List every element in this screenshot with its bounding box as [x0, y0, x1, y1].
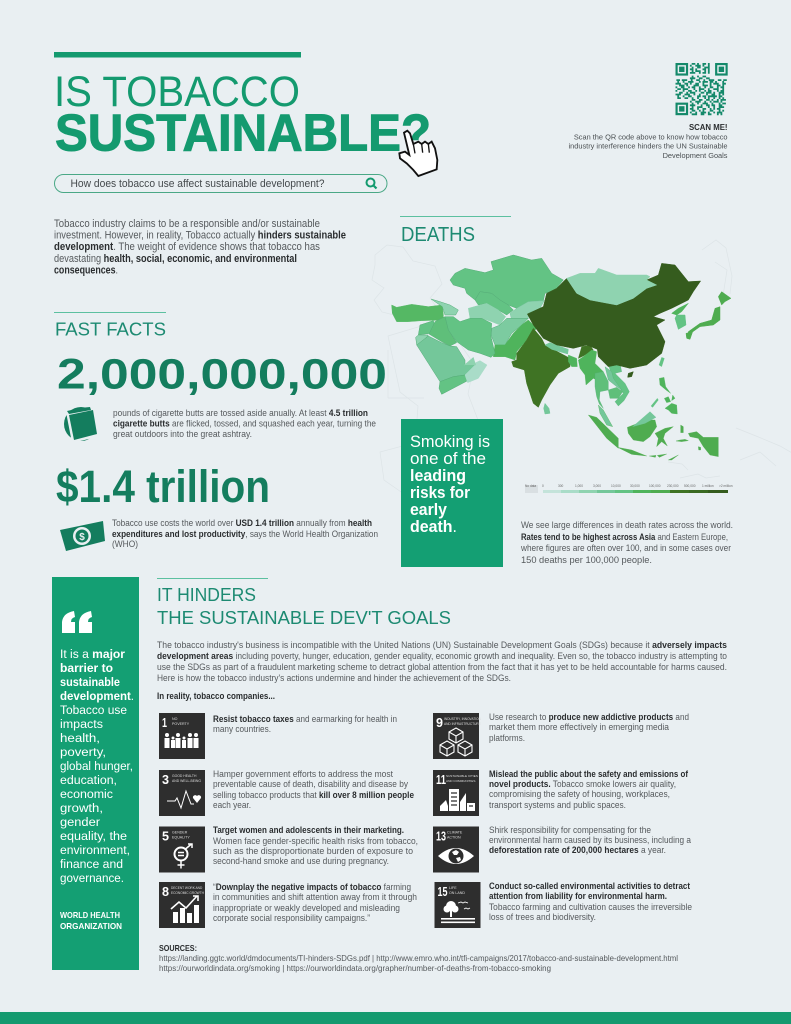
- butts description: [113, 408, 376, 439]
- quote text: economic: [60, 787, 113, 801]
- quote text: It is a major: [60, 647, 125, 661]
- SDG 3 item: Hamper government efforts to address the most: [213, 769, 393, 779]
- SDG 15 item: Conduct so-called environmental activities to detract: [489, 881, 690, 891]
- quote attribution: WORLD HEALTH: [60, 911, 120, 920]
- SDG 5 item: Target women and adolescents in their marketing.: [213, 825, 404, 835]
- SDG 9 item: [433, 712, 689, 759]
- big number: $1.4 trillion: $1.4 trillion: [56, 461, 270, 512]
- faint background world outlines: [372, 240, 791, 494]
- QR code: [676, 64, 727, 114]
- map legend: [525, 484, 733, 493]
- SDG 5 item: 5: [162, 828, 169, 844]
- SDG 9 item: Use research to produce new addictive products and: [489, 712, 689, 722]
- title: [54, 52, 431, 162]
- SDG 8 item: corporate social responsibility campaigns.”: [213, 913, 370, 923]
- deaths heading: [400, 216, 511, 246]
- quote text: environment,: [60, 843, 130, 857]
- map legend: 10,000: [611, 484, 621, 488]
- SDG 8 item: “Downplay the negative impacts of tobacco farming: [213, 882, 411, 892]
- map description text: 150 deaths per 100,000 people.: [521, 555, 652, 565]
- SDG 3 item: GOOD HEALTH: [172, 774, 197, 778]
- QR caption: Scan the QR code above to know how tobacco: [574, 132, 728, 142]
- QR caption: SCAN ME!: [689, 123, 728, 132]
- section intro paragraph: use the SDGs as part of a fraudulent marketing scheme to detract global attention from the fact that it has yet to be held accountable for harms caused.: [157, 662, 727, 672]
- intro text block: development. The weight of evidence shows that tobacco has: [54, 241, 320, 253]
- SDG 11 item: novel products. Tobacco smoke lowers air quality,: [489, 779, 676, 789]
- SDG 5 item: Women face gender-specific health risks from tobacco,: [213, 836, 418, 846]
- icon: cigarette butts bin: [64, 406, 101, 443]
- callout: smoking leading risk: one of the: [410, 450, 486, 468]
- map legend: 30,000: [630, 484, 640, 488]
- SDG 13 item: environmental harm caused by its business, including a: [489, 835, 691, 845]
- SDG 8 item: [159, 882, 417, 928]
- choropleth map of Asia: [392, 255, 731, 460]
- callout: smoking leading risk: leading: [410, 467, 466, 485]
- SDG 11 item: SUSTAINABLE CITIES: [446, 774, 478, 778]
- map legend: 300: [558, 484, 564, 488]
- cost description: [112, 518, 378, 549]
- SDG 15 item: [434, 881, 692, 928]
- map legend: 230,000: [667, 484, 679, 488]
- SDG 9 item: INDUSTRY, INNOVATION: [444, 717, 482, 721]
- quote text: gender: [60, 815, 100, 829]
- icon: banknote: $: [79, 532, 85, 543]
- SDG 1 item: 1: [162, 715, 167, 730]
- SDG 13 item: 13: [436, 828, 446, 844]
- SDG 5 item: GENDER: [172, 830, 188, 834]
- quote text: health,: [60, 731, 100, 745]
- SDG 5 item: EQUALITY: [172, 836, 190, 840]
- cost description: (WHO): [112, 539, 138, 549]
- intro text block: investment. However, in reality, Tobacco actually hinders sustainable: [54, 230, 346, 242]
- title: SUSTAINABLE?: [55, 104, 431, 162]
- SDG 15 item: ON LAND: [449, 891, 465, 895]
- section intro paragraph: The tobacco industry's business is incompatible with the United Nations (UN) Sustainable Development Goals (SDGs) because it adversely impacts: [157, 640, 727, 650]
- sources: https://landing.ggtc.world/dmdocuments/TI-hinders-SDGs.pdf | http://www.emro.who.int/tfi-campaigns/2017/tobacco-and-sustainable-development.html: [159, 954, 678, 963]
- quote text: development.: [60, 689, 134, 703]
- SDG 15 item: LIFE: [449, 886, 457, 890]
- icon: pointer hand cursor: [399, 131, 437, 176]
- callout: smoking leading risk: Smoking is: [410, 433, 490, 451]
- QR caption: [568, 123, 728, 160]
- quote text: education,: [60, 773, 117, 787]
- fast facts heading: FAST FACTS: [55, 318, 166, 340]
- SDG 5 item: [159, 825, 418, 872]
- butts description: great outdoors into the great ashtray.: [113, 429, 252, 439]
- search bar: How does tobacco use affect sustainable development?: [70, 178, 324, 190]
- SDG 13 item: CLIMATE: [447, 830, 463, 834]
- section heading: it hinders: [157, 578, 451, 628]
- map legend: No data: [525, 484, 536, 488]
- intro text block: devastating health, social, economic, and environmental: [54, 253, 297, 265]
- map legend: 3,000: [593, 484, 601, 488]
- SDG 5 item: such as the disproportionate burden of exposure to: [213, 846, 413, 856]
- big number: 2,000,000,000: 2,000,000,000: [57, 350, 387, 398]
- intro text block: Tobacco industry claims to be a responsible and/or sustainable: [54, 218, 320, 230]
- quote text: global hunger,: [60, 759, 133, 773]
- SDG 1 item: Resist tobacco taxes and earmarking for health in: [213, 714, 397, 724]
- SDG 5 item: second-hand smoke and use during pregnancy.: [213, 856, 389, 866]
- quote text: finance and: [60, 857, 123, 871]
- SDG 8 item: 8: [162, 884, 169, 899]
- SDG 3 item: 3: [162, 772, 169, 787]
- SDG 13 item: Shirk responsibility for compensating for the: [489, 825, 651, 835]
- map legend: >2 million: [719, 484, 733, 488]
- map legend: 0: [542, 484, 544, 488]
- SDG 3 item: AND WELL-BEING: [172, 779, 201, 783]
- SDG 11 item: AND COMMUNITIES: [446, 779, 475, 783]
- sources: SOURCES:: [159, 944, 197, 953]
- section intro paragraph: [157, 640, 727, 683]
- SDG 15 item: Tobacco farming and cultivation causes the irreversible: [489, 902, 692, 912]
- SDG 13 item: [433, 825, 691, 872]
- map legend: 500,000: [684, 484, 696, 488]
- quote attribution: [60, 911, 122, 931]
- quote text: equality, the: [60, 829, 127, 843]
- icon: quotation marks: [62, 611, 92, 633]
- map description text: [520, 520, 733, 565]
- SDG 9 item: platforms.: [489, 733, 525, 743]
- SDG 3 item: selling tobacco products that kill over 8 million people: [213, 790, 414, 800]
- quote text: Tobacco use: [60, 703, 127, 717]
- map description text: We see large differences in death rates across the world.: [521, 520, 733, 530]
- butts description: cigarette butts are flicked, tossed, and squashed each year, turning the: [113, 418, 376, 428]
- SDG 3 item: [159, 769, 414, 816]
- quote text: impacts: [60, 717, 103, 731]
- SDG 1 item: many countries.: [213, 724, 271, 734]
- SDG 1 item: [159, 713, 397, 759]
- deaths heading: DEATHS: [401, 224, 475, 246]
- SDG 11 item: compromising the safety of housing, workplaces,: [489, 789, 670, 799]
- quote text: growth,: [60, 801, 103, 815]
- cost description: Tobacco use costs the world over USD 1.4 trillion annually from health: [112, 518, 372, 528]
- footer bar: [0, 1012, 791, 1024]
- map legend: 100,000: [649, 484, 661, 488]
- map description text: where figures are often over 100, and in some cases over: [520, 543, 731, 553]
- SDG 13 item: deforestation rate of 200,000 hectares a year.: [489, 845, 666, 855]
- SDG 3 item: preventable cause of death, disability and disease by: [213, 779, 408, 789]
- SDG 15 item: loss of trees and biodiversity.: [489, 912, 596, 922]
- SDG 8 item: in communities and shift attention away from it through: [213, 892, 417, 902]
- quote attribution: ORGANIZATION: [60, 922, 122, 931]
- SDG 15 item: attention from liability for environmental harm.: [489, 891, 667, 901]
- SDG 1 item: POVERTY: [172, 722, 190, 726]
- SDG 9 item: 9: [436, 715, 443, 730]
- SDG 1 item: NO: [172, 717, 178, 721]
- butts description: pounds of cigarette butts are tossed aside anually. At least 4.5 trillion: [113, 408, 368, 418]
- callout: smoking leading risk: death.: [410, 518, 457, 536]
- subheading: in reality: In reality, tobacco companies...: [157, 691, 275, 701]
- QR caption: industry interference hinders the UN Sustainable: [568, 142, 728, 150]
- map description text: Rates tend to be highest across Asia and Eastern Europe,: [521, 532, 728, 542]
- panel: quote: [52, 577, 139, 970]
- section intro paragraph: development areas including poverty, hunger, education, gender equality, economic growth and inequality. Even so, the tobacco industry is attempting to: [157, 651, 727, 661]
- icon: banknote: [60, 521, 105, 551]
- section heading: it hinders: THE SUSTAINABLE DEV'T GOALS: [157, 607, 451, 628]
- SDG 11 item: transport systems and public spaces.: [489, 800, 626, 810]
- SDG 15 item: 15: [438, 884, 448, 899]
- SDG 13 item: ACTION: [447, 836, 461, 840]
- quote text: barrier to: [60, 661, 113, 675]
- quote text: governance.: [60, 871, 124, 885]
- SDG 11 item: 11: [436, 772, 446, 787]
- callout: smoking leading risk: risks for: [410, 484, 471, 502]
- SDG 11 item: [433, 769, 689, 816]
- section heading: it hinders: IT HINDERS: [157, 584, 256, 605]
- search bar: [54, 174, 387, 192]
- QR caption: Development Goals: [663, 151, 728, 160]
- SDG 8 item: ECONOMIC GROWTH: [171, 891, 205, 895]
- callout: smoking leading risk: early: [410, 501, 448, 519]
- SDG 9 item: AND INFRASTRUCTURE: [444, 722, 481, 726]
- title: IS TOBACCO: [54, 68, 300, 116]
- quote text: poverty,: [60, 745, 106, 759]
- SDG 11 item: Mislead the public about the safety and emissions of: [489, 769, 689, 779]
- SDG 9 item: market them more effectively in emerging media: [489, 722, 669, 732]
- quote text: [60, 647, 134, 885]
- callout: smoking leading risk: [401, 419, 503, 567]
- sources: [159, 944, 678, 973]
- sources: https://ourworldindata.org/smoking | https://ourworldindata.org/grapher/number-of-deaths-from-tobacco-smoking: [159, 964, 551, 973]
- quote text: sustainable: [60, 675, 120, 689]
- section intro paragraph: Here is how the tobacco industry's actions undermine and hinder the achievement of the SDGs.: [157, 673, 511, 683]
- intro text block: [54, 218, 346, 276]
- cost description: expenditures and lost productivity, says the World Health Organization: [112, 529, 378, 539]
- SDG 8 item: DECENT WORK AND: [171, 886, 203, 890]
- SDG 8 item: inappropriate or weakly developed and misleading: [213, 903, 400, 913]
- map legend: 1 million: [702, 484, 714, 488]
- map legend: 1,000: [575, 484, 583, 488]
- intro text block: consequences.: [54, 264, 118, 276]
- SDG 3 item: each year.: [213, 800, 251, 810]
